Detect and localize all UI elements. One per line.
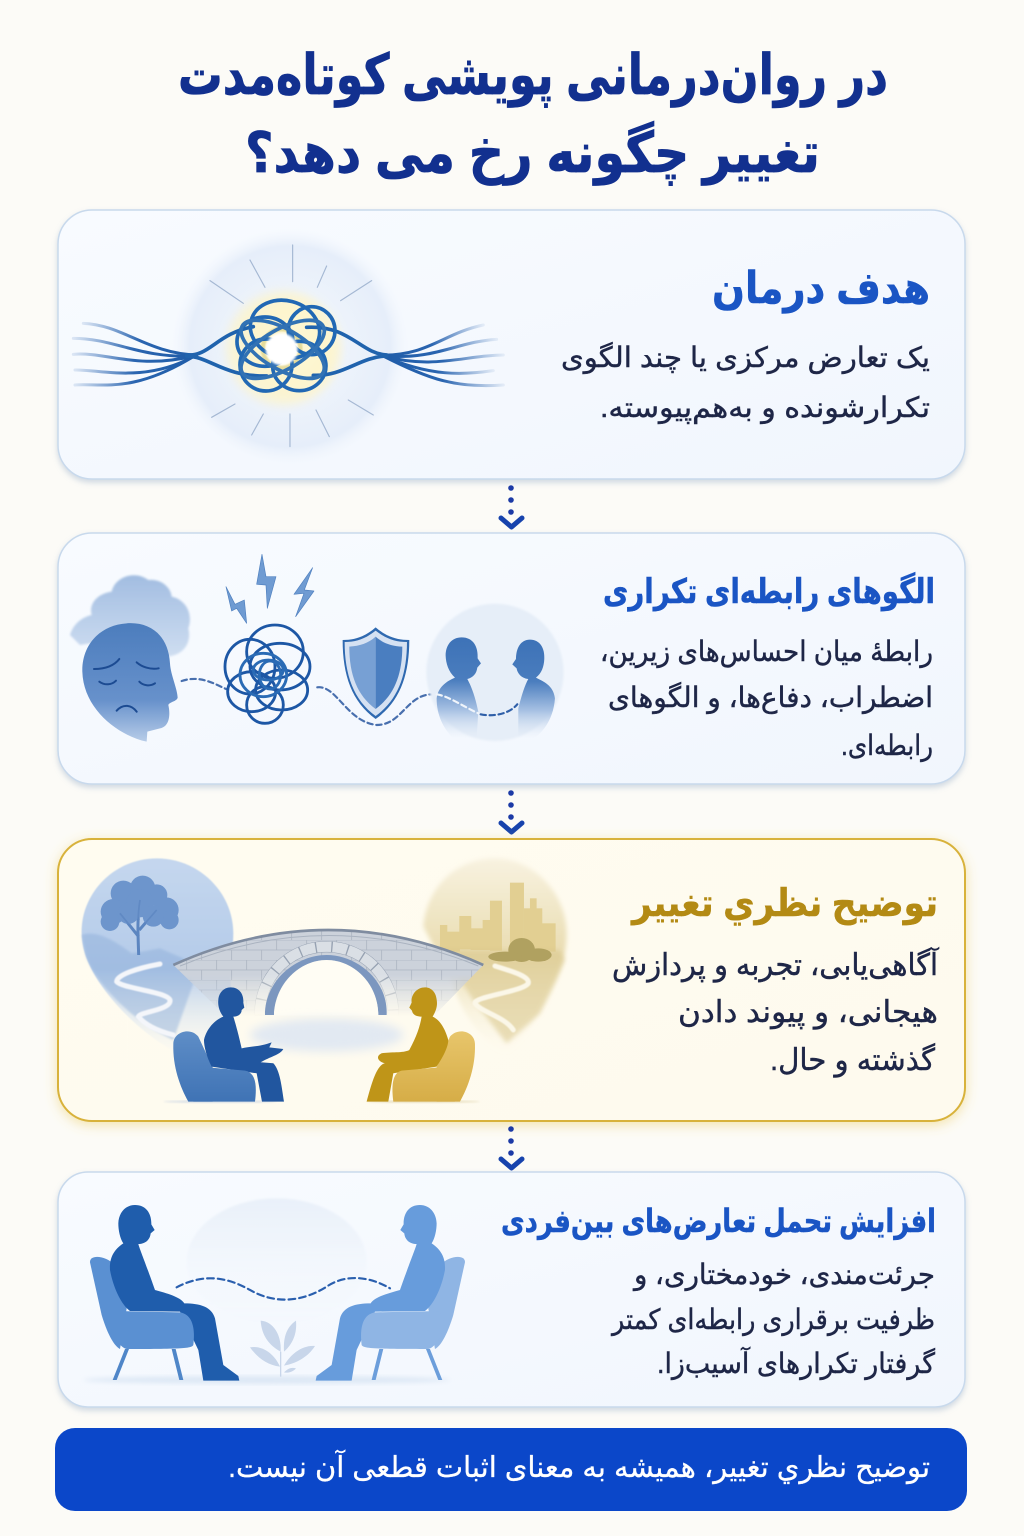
heading: توضیح نظري تغییر [630, 883, 938, 925]
icon: tangle [225, 625, 310, 723]
icon: lightning bolts [226, 554, 314, 623]
icon: shield [343, 627, 409, 719]
text block [612, 947, 940, 1078]
icon: tree [101, 876, 179, 955]
callout: footer note [55, 1428, 967, 1511]
title [178, 43, 888, 186]
heading: هدف درمان [712, 264, 930, 314]
text block: رابطهٔ میان احساس‌های زیرین، [600, 636, 933, 668]
text block: جرئت‌مندی، خودمختاری، و [632, 1259, 935, 1291]
illustration: past and present bridge with two seated people [82, 858, 567, 1103]
arrow [501, 1126, 522, 1168]
icon: cloud [70, 575, 190, 657]
icon: sad face [82, 623, 178, 742]
title: تغییر چگونه رخ می دهد؟ [245, 121, 820, 186]
illustration: face, tangle, shield, two people [70, 554, 564, 742]
text block: تکرارشونده و به‌هم‌پیوسته. [600, 392, 930, 424]
text block [600, 636, 933, 762]
illustration: two seated people with plant [83, 1198, 465, 1384]
text block: گرفتار تکرارهای آسیب‌زا. [657, 1347, 936, 1380]
figure: left person [90, 1205, 239, 1381]
text block: هیجانی، و پیوند دادن [678, 996, 938, 1030]
present skyline [423, 858, 567, 1053]
dashed connection [177, 1278, 390, 1300]
icon: plant [250, 1321, 315, 1377]
panel: tolerance of interpersonal conflict [58, 1172, 965, 1407]
heading: الگوهای رابطه‌ای تکراری [603, 572, 935, 612]
text block: گذشته و حال. [770, 1043, 936, 1078]
panel: goal of therapy [58, 210, 965, 479]
panel: theoretical explanation of change [58, 839, 965, 1121]
figure: gold seated person [367, 987, 475, 1102]
panel: relational patterns [58, 533, 965, 784]
text block: ظرفیت برقراری رابطه‌ای کمتر [610, 1304, 935, 1336]
dashed path [182, 679, 437, 725]
text block: رابطه‌ای. [841, 730, 933, 762]
callout: footer note: توضیح نظري تغییر، همیشه به معنای اثبات قطعی آن نیست. [228, 1449, 930, 1484]
arrow [501, 485, 522, 527]
text block: آگاهی‌یابی، تجربه و پردازش [612, 947, 940, 983]
text block: یک تعارض مرکزی یا چند الگوی [561, 341, 930, 374]
arrow [501, 790, 522, 832]
figure: right person [316, 1205, 465, 1381]
text block: اضطراب، دفاع‌ها، و الگوهای [608, 681, 933, 714]
illustration: tangled knot with light [73, 228, 503, 465]
icon: two people circle [426, 604, 564, 741]
figure: blue seated person [173, 987, 284, 1102]
text block [610, 1259, 936, 1380]
past landscape [82, 858, 233, 1060]
bridge [172, 928, 484, 1054]
text block [561, 341, 930, 424]
